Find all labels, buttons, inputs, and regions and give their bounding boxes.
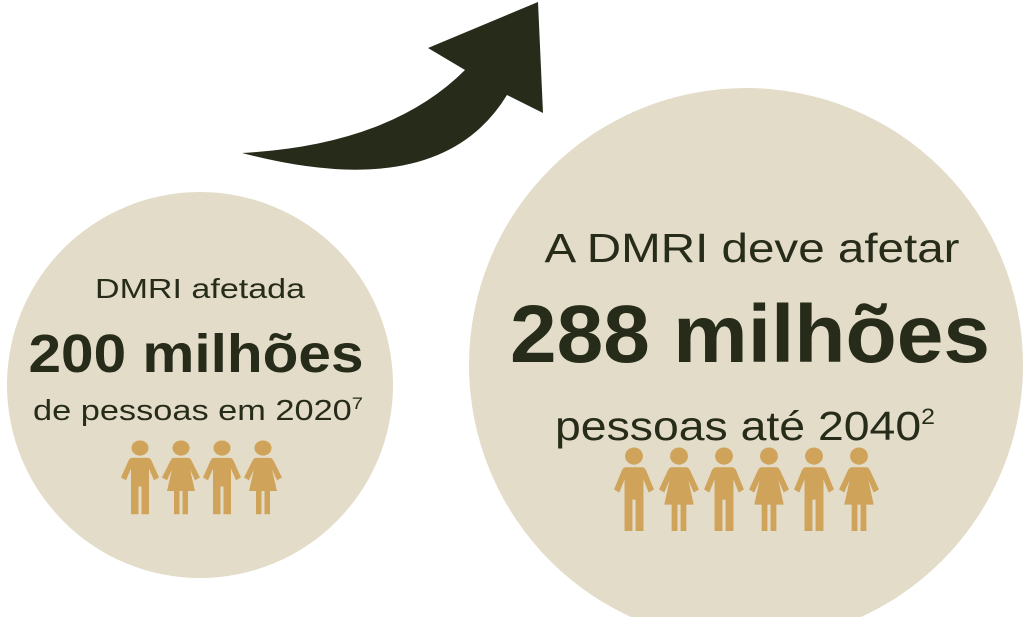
icons: 6 people xyxy=(614,448,879,531)
text: de pessoas em 2020: de pessoas em 2020 xyxy=(33,395,302,427)
arrow xyxy=(242,2,543,170)
icons: 4 people xyxy=(121,440,282,514)
panel: 2040 circle xyxy=(469,88,1023,617)
text: pessoas até 2040: pessoas até 2040 xyxy=(555,403,879,449)
number: 200 milhões: 200 milhões xyxy=(28,324,364,384)
text: A DMRI deve afetar: A DMRI deve afetar xyxy=(544,225,960,271)
text: pessoas até 2040: 2 xyxy=(921,404,935,429)
text: DMRI afetada: DMRI afetada xyxy=(95,273,306,304)
panel: 2020 circle xyxy=(7,192,393,578)
number: 288 milhões: 288 milhões xyxy=(510,289,990,380)
text: de pessoas em 2020: 7 xyxy=(352,394,363,413)
